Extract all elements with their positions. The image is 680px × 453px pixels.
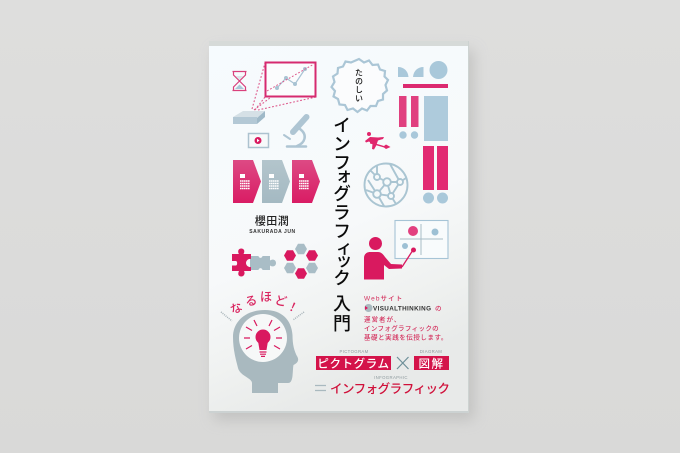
icon: equals sign [315, 386, 326, 390]
icon: projector beam [252, 63, 316, 110]
label: infographic: INFOGRAPHIC [374, 375, 408, 380]
badge: tanoshii [332, 59, 388, 112]
label: diagram: DIAGRAM [420, 349, 442, 354]
chevron: pink left [233, 160, 261, 203]
promo line 4: インフォグラフィックの [364, 324, 439, 332]
badge text: たのしい [354, 68, 364, 102]
icon: network circle [364, 164, 408, 206]
author name: 櫻田潤 [255, 214, 289, 228]
promo line 5: 基礎と実践を伝授します。 [364, 332, 448, 342]
tagline: infographic: インフォグラフィック [330, 381, 450, 396]
icon: hexagon ring [284, 244, 318, 279]
book shadow [214, 50, 474, 420]
label: pictogram: PICTOGRAM [339, 349, 369, 354]
icon: head with light bulb [233, 310, 298, 393]
headline: naruhodo: な [228, 300, 245, 317]
headline: naruhodo: ！ [284, 299, 301, 316]
logo mark [364, 304, 372, 312]
author name latin: SAKURADA JUN [249, 229, 296, 235]
icon: microscope [284, 117, 306, 146]
headline: naruhodo: ど [273, 293, 288, 309]
promo text [364, 294, 448, 342]
icon: pictogram bars small [399, 84, 448, 141]
icon: multiply sign [397, 357, 408, 369]
headline: naruhodo: る [244, 293, 259, 309]
icon: video screen [248, 134, 268, 148]
book cover [209, 41, 469, 413]
title: インフォグラフィック入門 [331, 116, 351, 332]
icon: puzzle pieces [232, 248, 276, 276]
icon: bulb [244, 320, 282, 356]
icon: pictogram bars large [423, 146, 448, 204]
icon: projector [233, 111, 265, 124]
icon: shapes row [398, 61, 448, 79]
tag: diagram [414, 356, 449, 370]
headline: naruhodo: ほ [260, 290, 272, 304]
dotted rays [221, 312, 304, 321]
tag: pictogram: ピクトグラム [317, 356, 390, 370]
icon: projected chart [266, 62, 316, 96]
promo line 1: Webサイト [364, 294, 403, 302]
tag: diagram: 図解 [418, 356, 444, 370]
promo line 2 suffix: の [435, 306, 442, 312]
icon: presenter [364, 237, 413, 280]
chevron: pink right [292, 160, 320, 203]
icon: hourglass [232, 72, 246, 90]
promo line 3: 運営者が、 [364, 314, 401, 324]
promo line 2: VISUALTHINKING [373, 306, 432, 312]
chevron: grey middle [262, 160, 290, 203]
chevron panels [233, 160, 320, 203]
icon: flying figure [365, 132, 390, 150]
icon: whiteboard [395, 220, 448, 258]
headline: naruhodo [228, 290, 301, 317]
